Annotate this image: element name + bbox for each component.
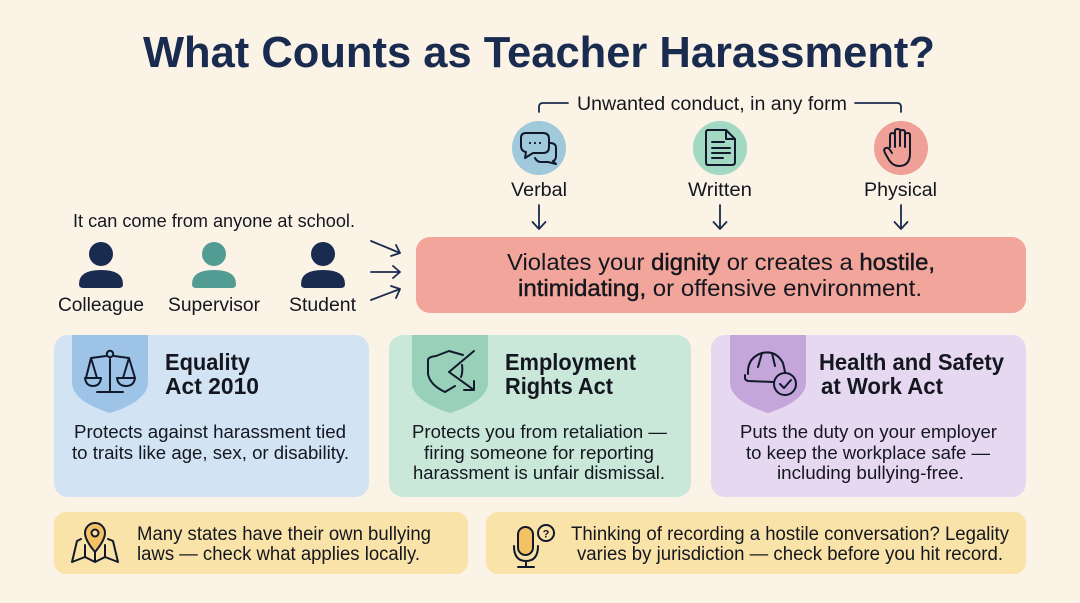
icon: microphone with question mark bbox=[514, 525, 554, 567]
icon: scales on shield bbox=[72, 335, 148, 413]
text: health and safety description: Puts the duty on your employer bbox=[740, 421, 997, 442]
text: employment rights act description bbox=[412, 421, 667, 483]
heading: equality act: Act 2010 bbox=[165, 373, 259, 399]
label: physical: Physical bbox=[864, 180, 937, 201]
icon: student person bbox=[301, 242, 345, 288]
text: equality act description: to traits like age, sex, or disability. bbox=[72, 442, 349, 463]
text: definition: intimidating, or offensive environment. bbox=[518, 275, 922, 301]
icon: physical hand bbox=[874, 121, 928, 175]
heading: employment rights act: Rights Act bbox=[505, 373, 613, 399]
panel: definition bbox=[416, 237, 1026, 313]
label: colleague: Colleague bbox=[58, 295, 144, 316]
arrow: written down bbox=[714, 205, 726, 229]
text: state laws bbox=[137, 524, 431, 565]
text: recording legality bbox=[571, 524, 1009, 565]
title: What Counts as Teacher Harassment? bbox=[143, 28, 935, 77]
heading: health and safety act: Health and Safety bbox=[819, 349, 1004, 375]
text: health and safety description bbox=[740, 421, 997, 483]
icon: map with pin bbox=[72, 523, 118, 562]
label: student: Student bbox=[289, 295, 357, 316]
text: definition bbox=[507, 249, 935, 301]
label: supervisor: Supervisor bbox=[168, 295, 261, 316]
text: employment rights act description: harassment is unfair dismissal. bbox=[413, 462, 665, 483]
heading: equality act: Equality bbox=[165, 349, 250, 375]
icon: microphone with question mark: ? bbox=[543, 528, 550, 540]
callout: recording legality bbox=[486, 512, 1026, 574]
text: recording legality: Thinking of recording a hostile conversation? Legality bbox=[571, 524, 1009, 545]
icon: colleague person bbox=[79, 242, 123, 288]
panel: health and safety act bbox=[711, 335, 1026, 497]
arrow: verbal down bbox=[532, 205, 546, 229]
text: employment rights act description: firing someone for reporting bbox=[424, 442, 654, 463]
panel: equality act bbox=[54, 335, 369, 497]
heading: health and safety act: at Work Act bbox=[821, 373, 943, 399]
icon: hard hat with check bbox=[730, 335, 806, 413]
icon: verbal speech bubbles bbox=[512, 121, 566, 175]
text: state laws: Many states have their own bullying bbox=[137, 524, 431, 545]
text: equality act description: Protects against harassment tied bbox=[74, 421, 346, 442]
arrow: physical down bbox=[894, 205, 908, 229]
heading: employment rights act bbox=[505, 349, 636, 399]
text: it can come from anyone: It can come from anyone at school. bbox=[73, 210, 355, 231]
text: recording legality: varies by jurisdiction — check before you hit record. bbox=[577, 544, 1003, 565]
heading: health and safety act bbox=[819, 349, 1004, 399]
text: employment rights act description: Protects you from retaliation — bbox=[412, 421, 667, 442]
icon: supervisor person bbox=[192, 242, 236, 288]
text: equality act description bbox=[72, 421, 349, 463]
heading: employment rights act: Employment bbox=[505, 349, 636, 375]
icon: written document bbox=[693, 121, 747, 175]
label: written: Written bbox=[688, 180, 752, 201]
label: verbal: Verbal bbox=[511, 180, 567, 201]
text: health and safety description: to keep the workplace safe — bbox=[746, 442, 990, 463]
icon: shield with arrow bbox=[412, 335, 488, 413]
text: health and safety description: including bullying-free. bbox=[777, 462, 964, 483]
text: definition: Violates your dignity or creates a hostile, bbox=[507, 249, 935, 275]
text: state laws: laws — check what applies locally. bbox=[137, 544, 420, 565]
heading: unwanted conduct with bracket: Unwanted conduct, in any form bbox=[577, 94, 847, 115]
arrows: sources to definition bbox=[371, 241, 400, 300]
heading: equality act bbox=[165, 349, 259, 399]
callout: state laws bbox=[54, 512, 468, 574]
panel: employment rights act bbox=[389, 335, 691, 497]
